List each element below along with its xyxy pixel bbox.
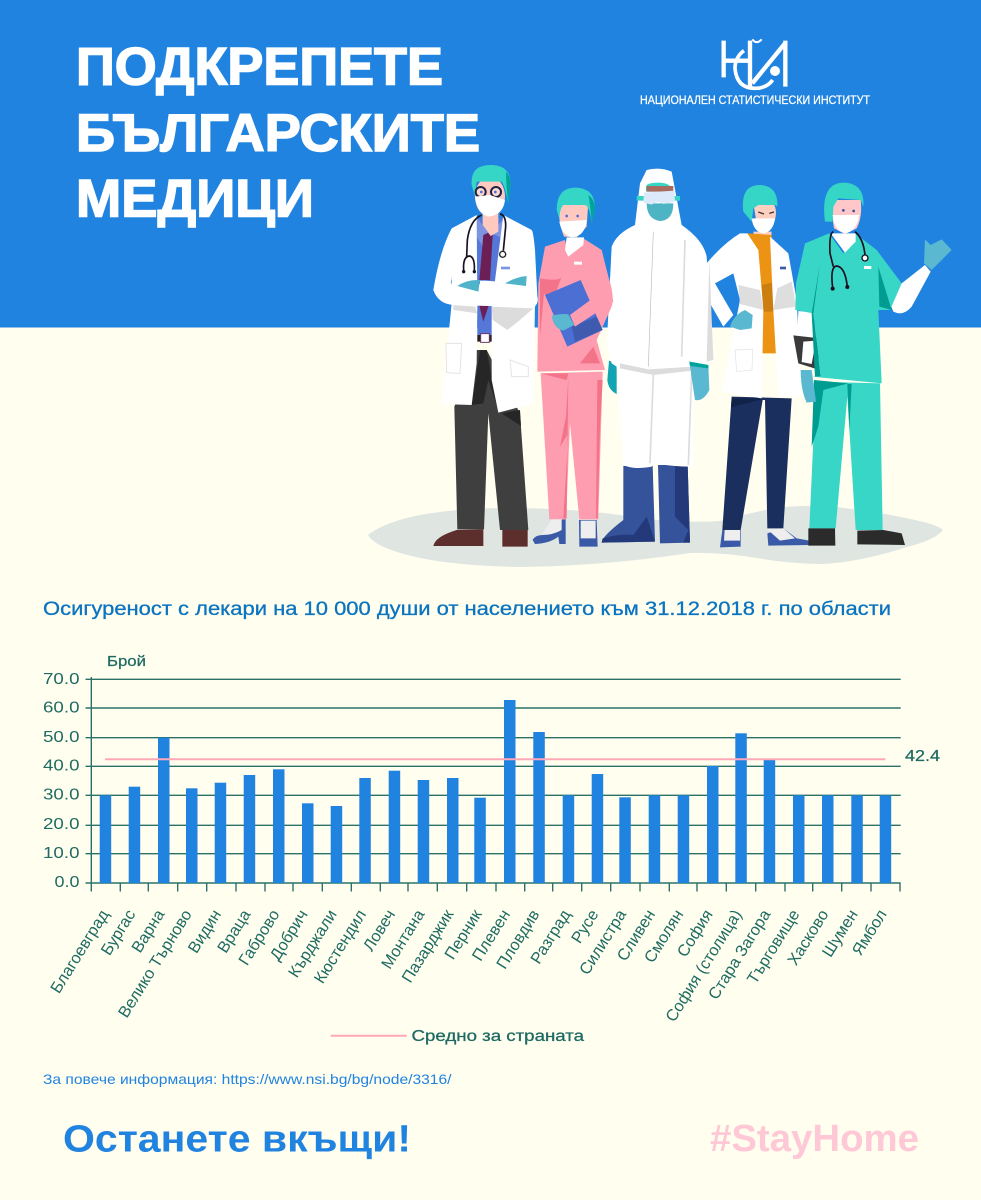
title: ПОДКРЕПЕТЕ	[76, 37, 443, 96]
category labels: Монтана	[378, 906, 429, 972]
category labels: Кюстендил	[311, 907, 370, 987]
y axis labels: 60.0	[43, 700, 80, 716]
category labels: Русе	[568, 907, 602, 947]
y axis labels: 20.0	[43, 816, 80, 833]
y axis labels: 0.0	[54, 874, 80, 891]
national average line	[105, 758, 885, 760]
category labels: Габрово	[235, 907, 283, 969]
illustration: medical team	[368, 165, 952, 567]
category labels: Търговище	[744, 907, 803, 987]
grid lines and axes	[86, 677, 901, 892]
category labels: Варна	[128, 906, 169, 956]
category labels: Пловдив	[493, 907, 543, 972]
title: МЕДИЦИ	[76, 170, 314, 228]
legend: Средно за страната	[412, 1028, 584, 1045]
blue header band	[0, 0, 981, 328]
category labels: София	[674, 907, 717, 960]
figure: nurse in pink	[533, 188, 613, 547]
category labels: Плевен	[469, 907, 514, 964]
category labels: Шумен	[819, 907, 862, 960]
category labels: Кърджали	[285, 907, 341, 981]
category labels: Враца	[214, 906, 255, 956]
hashtag: #StayHome	[710, 1118, 919, 1160]
category labels	[47, 906, 891, 1025]
source link: За повече информация: https://www.nsi.bg/bg/node/3316/	[43, 1071, 452, 1087]
category labels: Видин	[185, 907, 225, 956]
category labels: Стара Загора	[705, 906, 775, 1003]
category labels: Смолян	[641, 907, 687, 966]
logo: national statistical institute	[640, 39, 870, 107]
title: БЪЛГАРСКИТЕ	[76, 104, 480, 163]
category labels: Ловеч	[360, 907, 399, 954]
category labels: Ямбол	[849, 907, 891, 959]
average value label: 42.4	[905, 748, 940, 765]
y axis labels: 70.0	[43, 671, 80, 688]
category labels: Пазарджик	[398, 906, 458, 986]
y axis labels: 40.0	[43, 758, 80, 774]
bar chart	[43, 653, 940, 1045]
y axis labels: 50.0	[43, 729, 80, 746]
y axis labels	[43, 671, 80, 891]
figure: doctor in white coat and orange shirt	[697, 185, 809, 547]
figure: doctor in green scrubs	[793, 183, 952, 546]
logo: national statistical institute: НАЦИОНАЛЕН СТАТИСТИЧЕСКИ ИНСТИТУТ	[640, 95, 870, 107]
bars	[100, 700, 891, 883]
category labels: Благоевград	[47, 906, 113, 997]
y axis labels: 10.0	[43, 845, 80, 862]
figure: hazmat suit	[602, 169, 713, 543]
category labels: Перник	[441, 906, 486, 963]
figure: male doctor with stethoscope and tie	[433, 165, 538, 547]
category labels: Разград	[527, 906, 575, 967]
category labels: Велико Търново	[115, 907, 196, 1021]
y axis labels: 30.0	[43, 786, 80, 804]
category labels: Силистра	[576, 906, 631, 978]
category labels: Хасково	[784, 907, 832, 969]
title	[76, 37, 480, 228]
chart title: Осигуреност с лекари на 10 000 души от населението към 31.12.2018 г. по области	[43, 599, 891, 620]
category labels: Добрич	[267, 907, 312, 964]
y axis title: Брой	[107, 653, 146, 670]
category labels: Бургас	[98, 907, 139, 959]
stay home call to action: Останете вкъщи!	[63, 1118, 411, 1160]
category labels: София (столица)	[662, 907, 746, 1025]
category labels: Сливен	[614, 907, 659, 964]
ground shadow	[368, 506, 943, 567]
